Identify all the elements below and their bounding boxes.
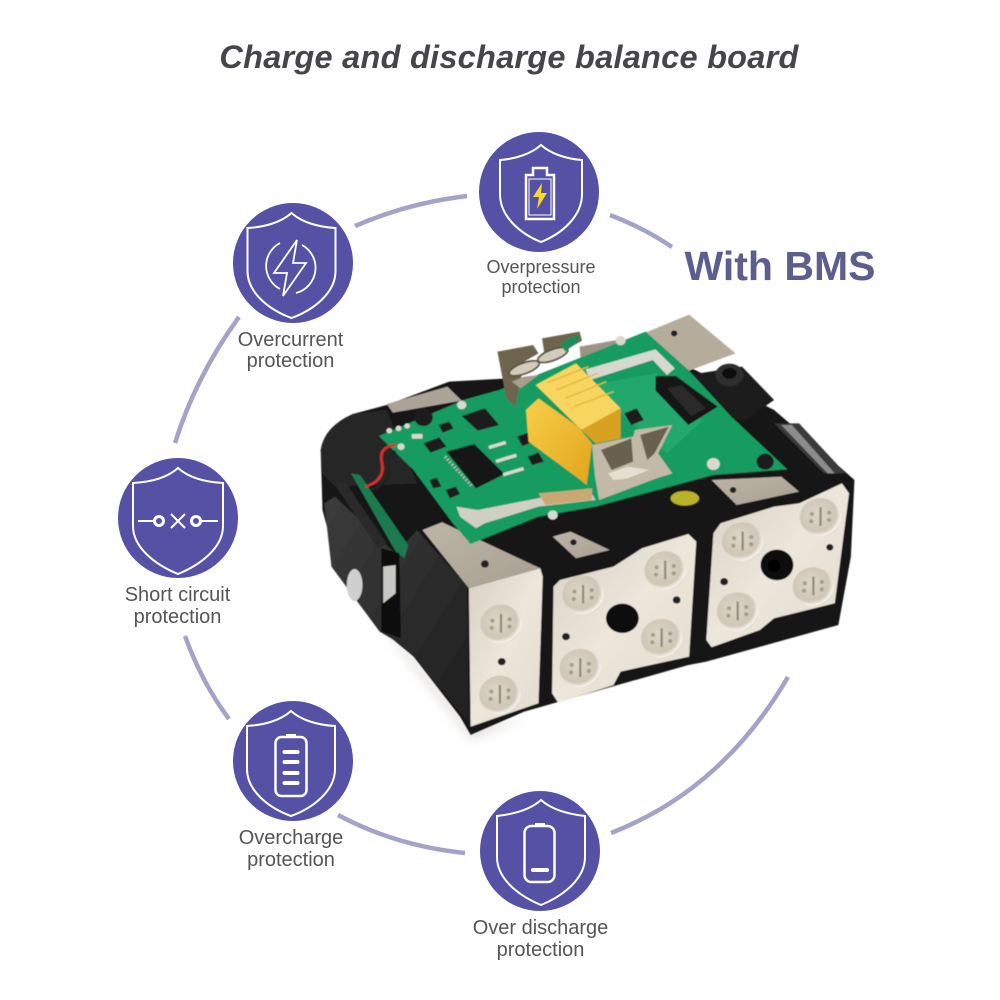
yellow connector [526, 363, 621, 485]
upper side shell [321, 410, 417, 487]
yellow cell glimpse [671, 491, 699, 506]
mosfet and small components [414, 408, 774, 498]
icon: overpressure shield [479, 132, 599, 252]
right side cell [774, 423, 846, 473]
label: overcharge: protection [247, 849, 335, 871]
label: overpressure: protection [501, 277, 581, 297]
metal plate: middle [552, 532, 696, 703]
metal plate: left [422, 522, 543, 727]
label: overcurrent: protection [247, 350, 334, 372]
black socket [656, 376, 718, 425]
black mounting post [688, 364, 774, 420]
icon: overcharge shield [233, 701, 353, 821]
icon: overcurrent shield [233, 203, 353, 323]
connecting ring arcs [175, 196, 788, 853]
battery body [321, 368, 854, 735]
top right metal tab [642, 315, 736, 371]
small resistors [386, 336, 720, 520]
silver rear tab [580, 340, 621, 365]
heading: With BMS: With BMS [685, 243, 875, 289]
label: over discharge: protection [497, 939, 584, 961]
side housing [324, 497, 469, 723]
label: overcharge: Overcharge [239, 827, 343, 849]
main chip [445, 444, 505, 488]
silver solder strip top [586, 349, 675, 380]
side small board and wire [335, 445, 408, 638]
product photo: battery pack with BMS board [321, 315, 854, 740]
label: short circuit: protection [134, 606, 221, 628]
label: overpressure: Overpressure [486, 257, 596, 277]
circuit board [379, 332, 787, 544]
board traces lighter [581, 373, 703, 453]
icon: over discharge shield [480, 791, 600, 911]
top left metal tab [387, 387, 462, 413]
metal plate: right [706, 477, 849, 647]
label: short circuit: Short circuit [125, 584, 231, 606]
icon: short circuit shield [118, 458, 238, 578]
front metal terminal clip [592, 425, 672, 500]
rear metal terminal clips [497, 332, 582, 407]
ground shadow [321, 543, 524, 740]
silver solder strip bottom [456, 488, 596, 528]
title: Charge and discharge balance board [219, 39, 800, 75]
label: overcurrent: Overcurrent [238, 329, 344, 351]
label: over discharge: Over discharge [473, 917, 608, 939]
